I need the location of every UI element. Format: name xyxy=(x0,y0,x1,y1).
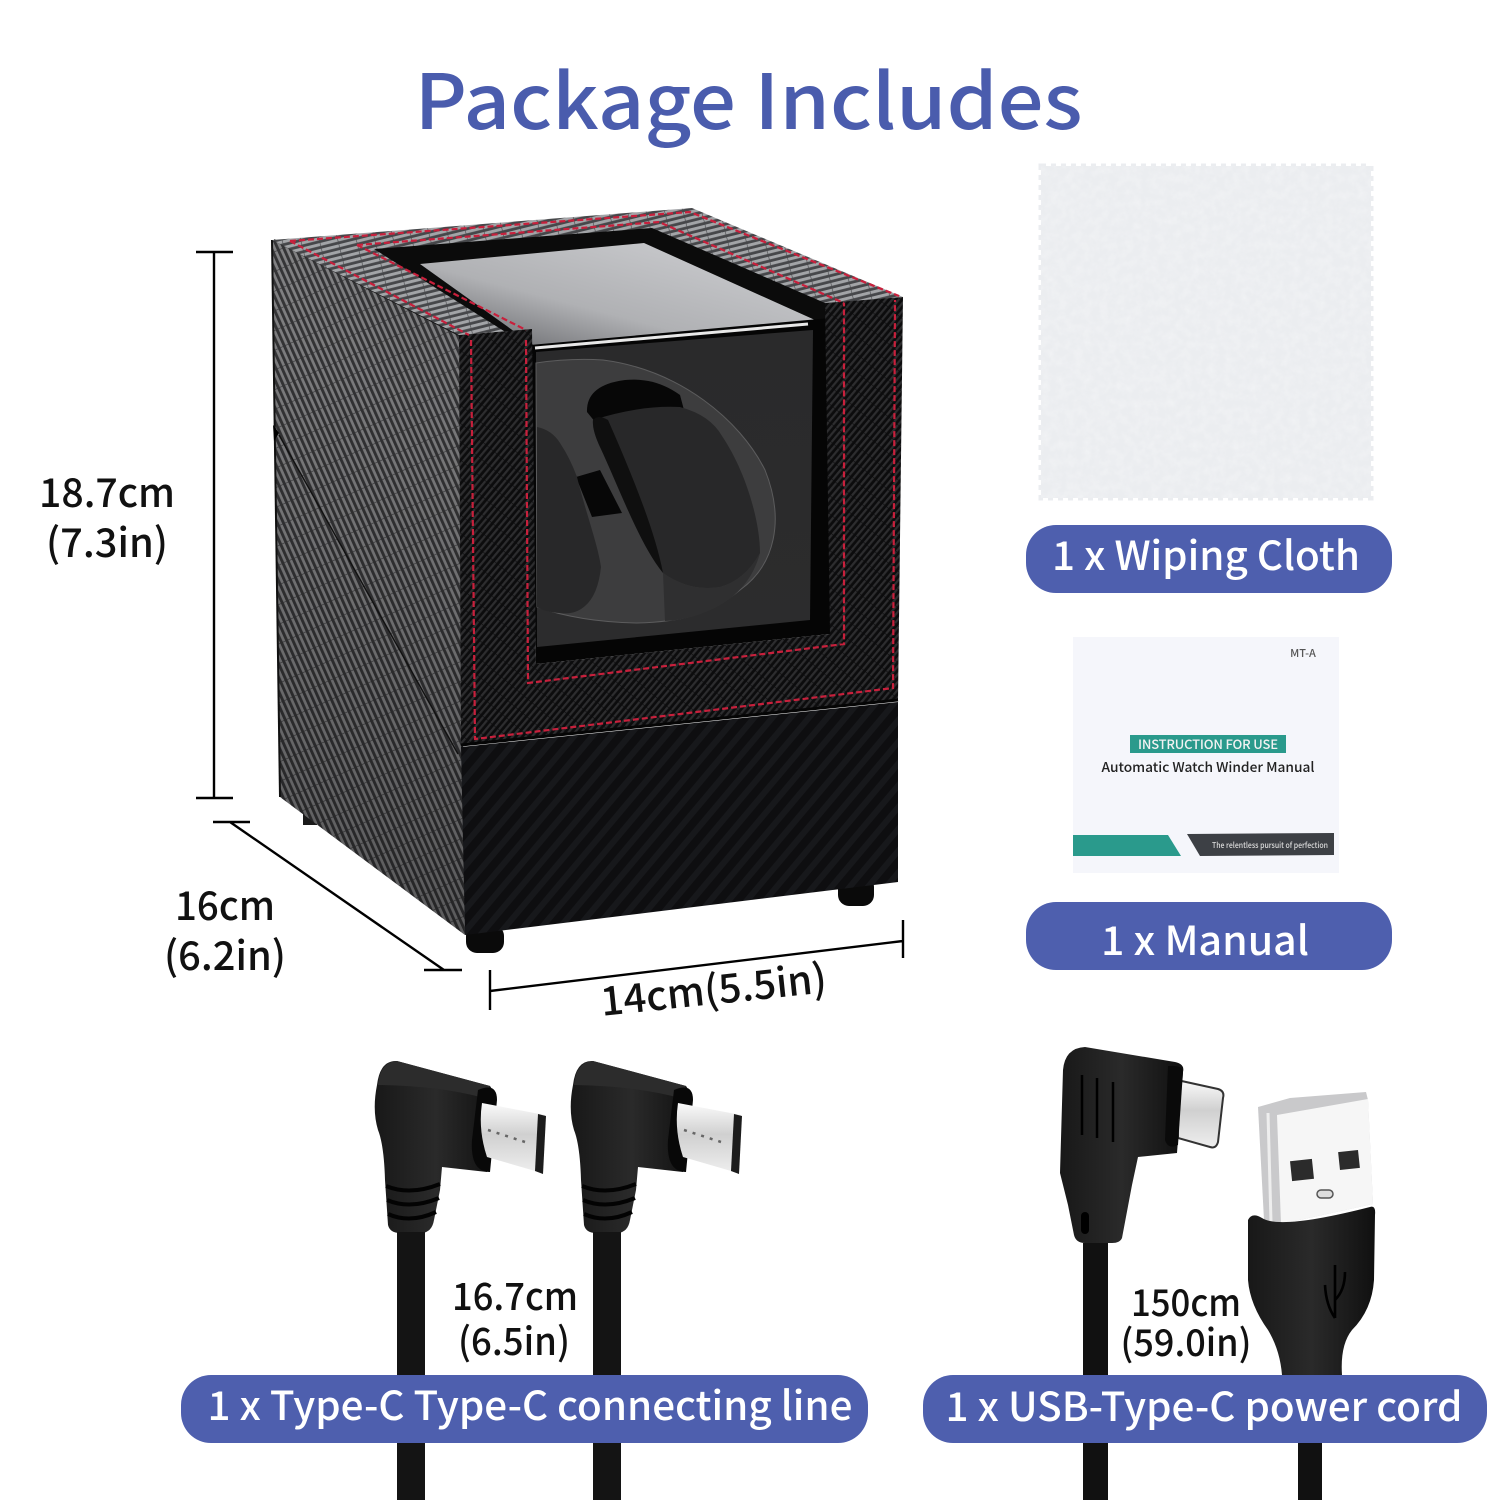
dimension: height xyxy=(39,252,233,798)
dimension: width xyxy=(490,920,903,1028)
cable length: Type-C: 16.7cm xyxy=(452,1266,578,1321)
label: manual: 1 x Manual xyxy=(1101,909,1309,967)
front frame xyxy=(459,297,903,745)
label: wiping cloth: 1 x Wiping Cloth xyxy=(1052,524,1360,582)
box feet xyxy=(303,805,874,953)
cable: USB Type-C right-angle end xyxy=(1060,1047,1223,1500)
watch cradles xyxy=(536,359,775,623)
cable length: USB xyxy=(1120,1273,1252,1367)
dimension: height: 18.7cm xyxy=(39,461,175,519)
wiping cloth xyxy=(1041,166,1371,498)
dimension: depth: (6.2in) xyxy=(164,924,286,982)
cable: Type-C connector 2 xyxy=(571,1061,742,1500)
cable: USB-A plug xyxy=(1248,1092,1375,1500)
display window xyxy=(530,318,830,664)
lower base xyxy=(461,700,898,935)
manual booklet: The relentless pursuit of perfection xyxy=(1212,840,1328,851)
label: manual xyxy=(1026,902,1392,970)
dimension: width: 14cm(5.5in) xyxy=(597,946,829,1028)
title: Package Includes xyxy=(414,41,1082,151)
dimension: depth: 16cm xyxy=(175,874,275,932)
dimension: depth xyxy=(164,822,462,982)
dimension: height: (7.3in) xyxy=(46,511,168,569)
red stitching xyxy=(290,212,899,739)
cable length: USB: (59.0in) xyxy=(1120,1313,1252,1367)
label: USB-Type-C power cord: 1 x USB-Type-C power cord xyxy=(946,1375,1462,1433)
box top frame xyxy=(272,208,903,335)
cable length: Type-C xyxy=(452,1266,578,1366)
cable: Type-C connector 1 xyxy=(375,1061,546,1500)
manual booklet: MT-A xyxy=(1290,645,1316,661)
cable length: USB: 150cm xyxy=(1131,1273,1241,1327)
box left side xyxy=(272,240,465,935)
cable length: Type-C: (6.5in) xyxy=(458,1311,570,1366)
manual booklet: Automatic Watch Winder Manual xyxy=(1102,756,1314,776)
product: watch winder box xyxy=(272,208,903,953)
label: Type-C connecting line: 1 x Type-C Type-C connecting line xyxy=(208,1374,852,1432)
manual booklet xyxy=(1073,637,1339,873)
manual heading bar: INSTRUCTION FOR USE xyxy=(1138,734,1278,753)
top opening and glass lid xyxy=(374,228,830,350)
